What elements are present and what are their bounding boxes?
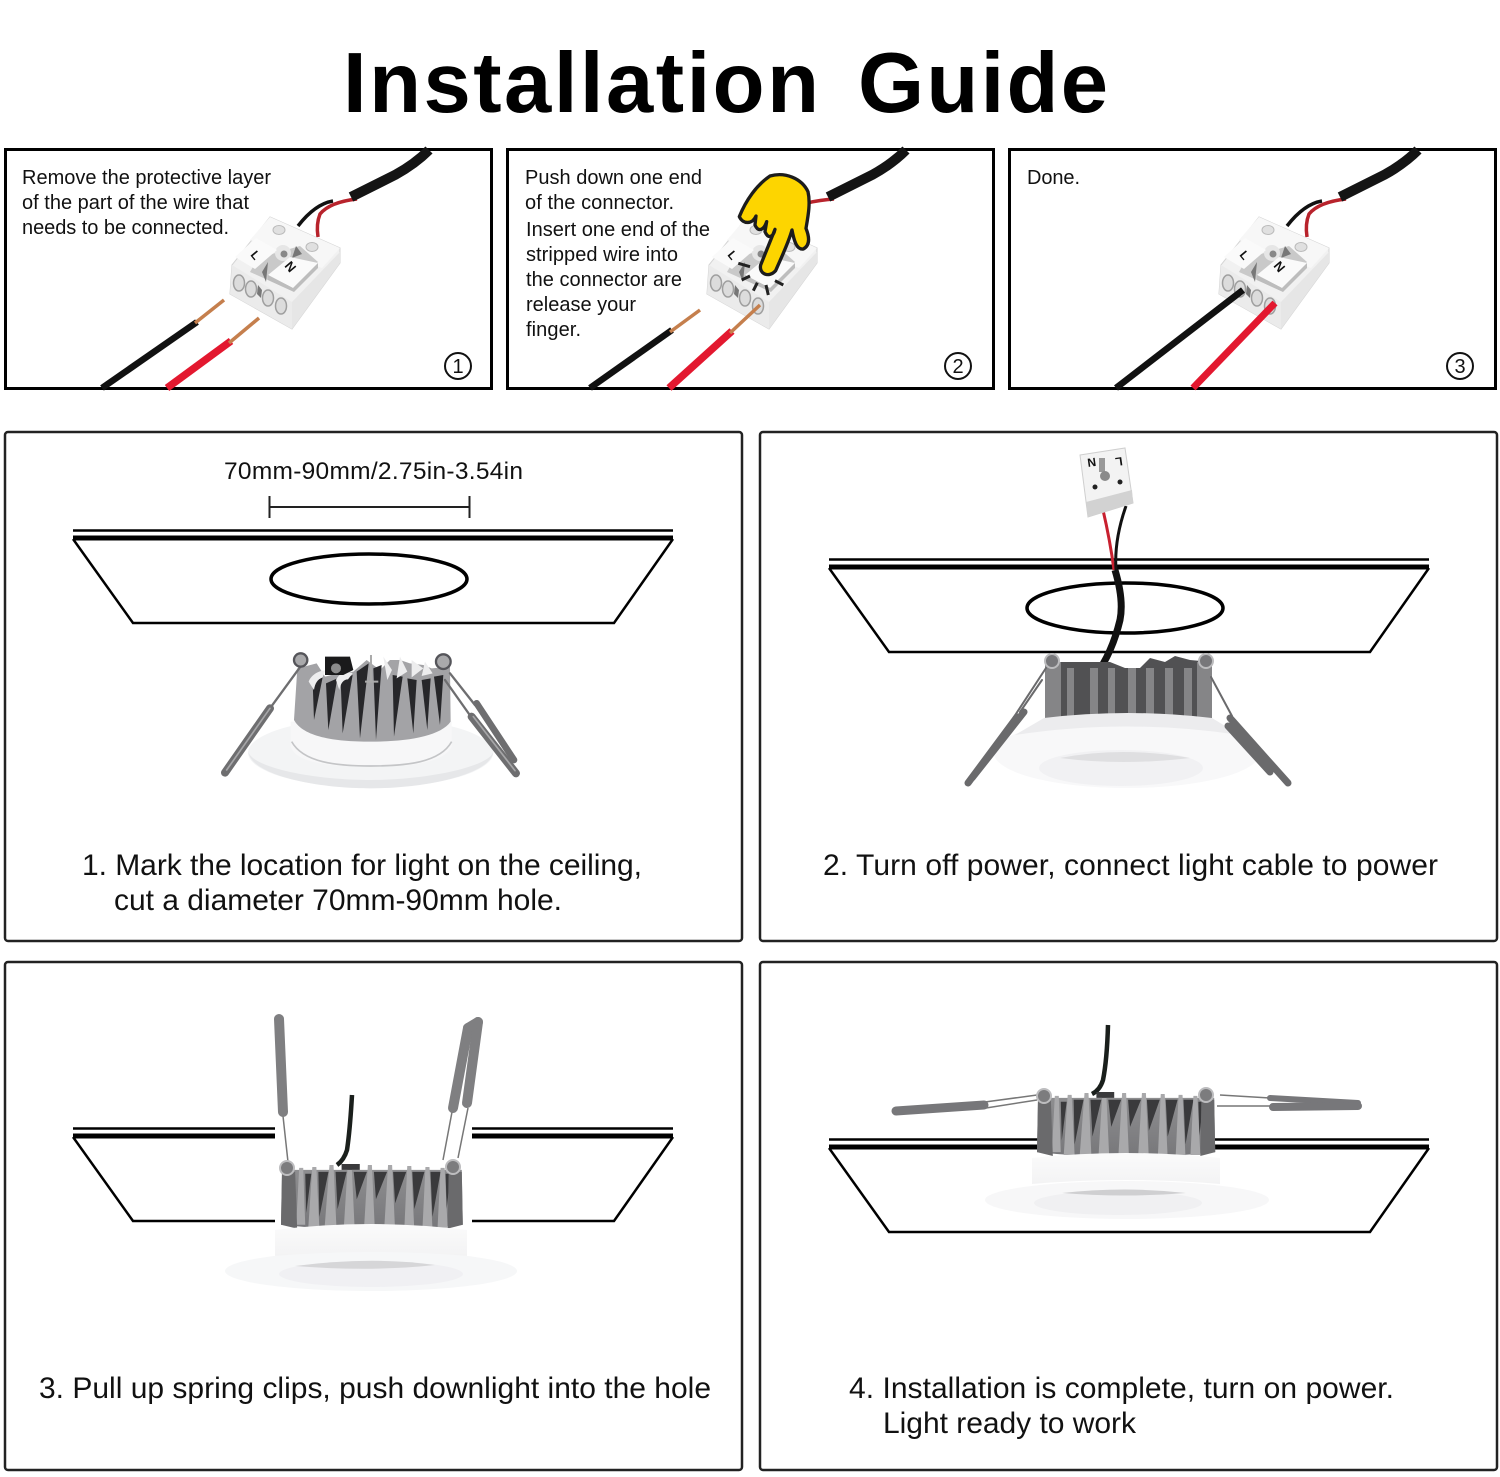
instruction text: stripped wire into — [526, 244, 678, 266]
inserted wires — [1116, 290, 1275, 388]
instruction text: release your — [526, 294, 636, 316]
caption — [849, 1372, 1394, 1440]
stripped red wire — [167, 318, 259, 388]
instruction text: the connector are — [526, 269, 682, 291]
step number 2 — [945, 353, 971, 379]
panel: 3 pull up clips — [5, 962, 742, 1470]
panel: 2 connect cable — [760, 432, 1497, 941]
caption: cut a diameter 70mm-90mm hole. — [114, 884, 562, 917]
connector on cable — [1080, 448, 1133, 517]
downlight with raised clips — [225, 1019, 517, 1291]
connector: L — [725, 248, 740, 263]
caption: 4. Installation is complete, turn on power. — [849, 1372, 1394, 1405]
cable into connector — [1287, 150, 1418, 237]
ceiling with opening — [73, 1128, 673, 1221]
caption: Light ready to work — [883, 1407, 1137, 1440]
panel: step 3 done — [1010, 150, 1496, 388]
instruction text — [525, 167, 710, 341]
title — [343, 36, 1108, 131]
downlight with spring clips — [968, 654, 1288, 788]
step number 3 — [1447, 353, 1473, 379]
instruction text: Done. — [1027, 167, 1080, 189]
instruction text: Insert one end of the — [526, 219, 710, 241]
instruction text — [22, 167, 271, 239]
panel: 1 mark and cut hole — [5, 432, 742, 941]
caption: 2. Turn off power, connect light cable to power — [823, 849, 1438, 882]
connector — [230, 217, 340, 329]
caption: 3. Pull up spring clips, push downlight into the hole — [39, 1372, 711, 1405]
connector — [707, 217, 817, 329]
ceiling with hole — [829, 560, 1429, 652]
dimension label: 70mm-90mm/2.75in-3.54in — [224, 458, 523, 485]
caption: 1. Mark the location for light on the ceiling, — [82, 849, 642, 882]
panel: step 2 insert wire — [508, 150, 994, 388]
connector: L — [248, 248, 263, 263]
downlight installed — [896, 1025, 1358, 1219]
step number 1 — [445, 353, 471, 379]
cable into connector — [807, 150, 906, 203]
connector: N — [1271, 258, 1288, 275]
step number 2: 2 — [952, 356, 964, 378]
step number 3: 3 — [1454, 356, 1466, 378]
red wire inserted — [669, 305, 760, 388]
cable into connector — [298, 150, 429, 237]
caption — [82, 849, 642, 917]
title: Guide — [858, 36, 1108, 131]
connector — [1219, 217, 1329, 329]
connector: L — [1237, 248, 1252, 263]
connector on cable: N — [1086, 455, 1097, 470]
stripped black wire — [590, 310, 700, 388]
instruction text: of the connector. — [525, 192, 674, 214]
downlight with spring clips — [225, 653, 516, 788]
instruction text: finger. — [526, 319, 581, 341]
instruction text: needs to be connected. — [22, 217, 229, 239]
icon: pressing hand — [738, 175, 809, 295]
dimension bracket — [269, 496, 470, 518]
title: Installation — [343, 36, 819, 131]
instruction text: of the part of the wire that — [22, 192, 249, 214]
ceiling — [829, 1140, 1429, 1232]
panel: step 1 strip wire — [6, 150, 492, 388]
power cable — [1103, 506, 1126, 664]
panel: 4 installation complete — [760, 962, 1497, 1470]
ceiling with hole — [73, 530, 673, 623]
stripped black wire — [102, 300, 224, 388]
step number 1: 1 — [452, 356, 464, 378]
instruction text: Remove the protective layer — [22, 167, 271, 189]
connector: N — [282, 258, 299, 275]
instruction text: Push down one end — [525, 167, 702, 189]
connector on cable: L — [1114, 454, 1124, 469]
